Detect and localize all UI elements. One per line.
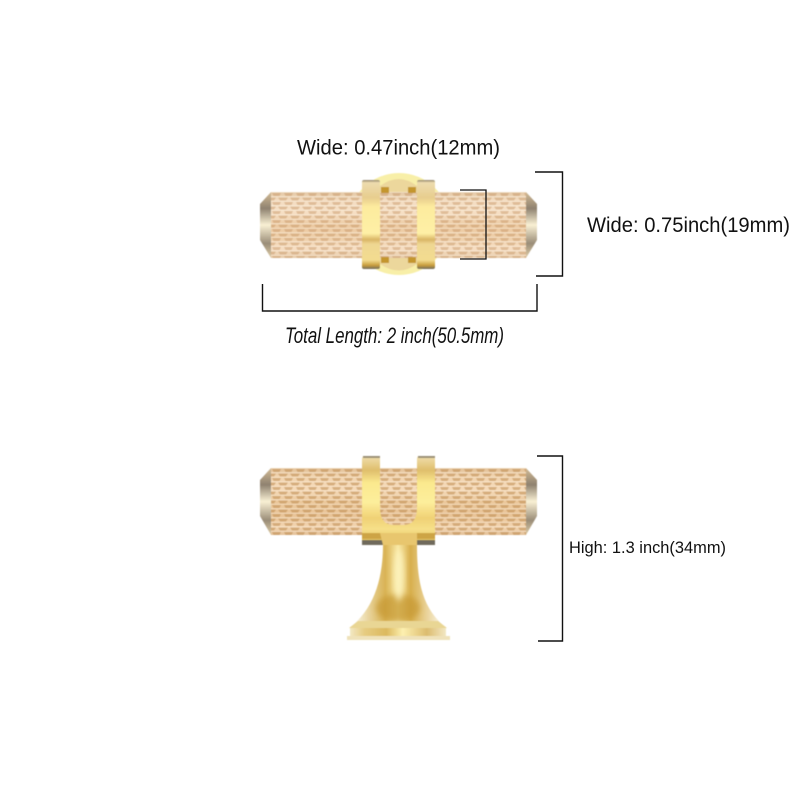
label: wide 12mm: Wide: 0.47inch(12mm) bbox=[297, 136, 500, 160]
left strap bbox=[362, 180, 380, 269]
stem bbox=[353, 544, 443, 625]
right end cap bbox=[526, 192, 537, 258]
bracket: inner width bbox=[460, 190, 486, 259]
left end cap bbox=[260, 468, 271, 535]
lower saddle bbox=[380, 258, 417, 270]
bracket: total length bbox=[262, 284, 537, 311]
knurled bar bbox=[271, 468, 526, 535]
mounting disc bbox=[348, 173, 450, 275]
knurled bar bbox=[271, 192, 526, 258]
upper saddle bbox=[380, 179, 417, 192]
left end cap bbox=[260, 192, 271, 258]
bracket: height bbox=[537, 456, 562, 641]
label: total length: Total Length: 2 inch(50.5mm) bbox=[285, 323, 504, 348]
knob top view bbox=[260, 173, 537, 275]
right strap bbox=[417, 180, 435, 269]
bracket: right width bbox=[535, 172, 562, 276]
base flange bbox=[347, 621, 450, 640]
screw glints bbox=[381, 187, 416, 263]
label: height: High: 1.3 inch(34mm) bbox=[569, 539, 726, 557]
label: wide 19mm: Wide: 0.75inch(19mm) bbox=[587, 214, 790, 237]
knob side view bbox=[260, 456, 537, 640]
right end cap bbox=[526, 468, 537, 535]
U-shaped bracket bbox=[362, 456, 435, 545]
